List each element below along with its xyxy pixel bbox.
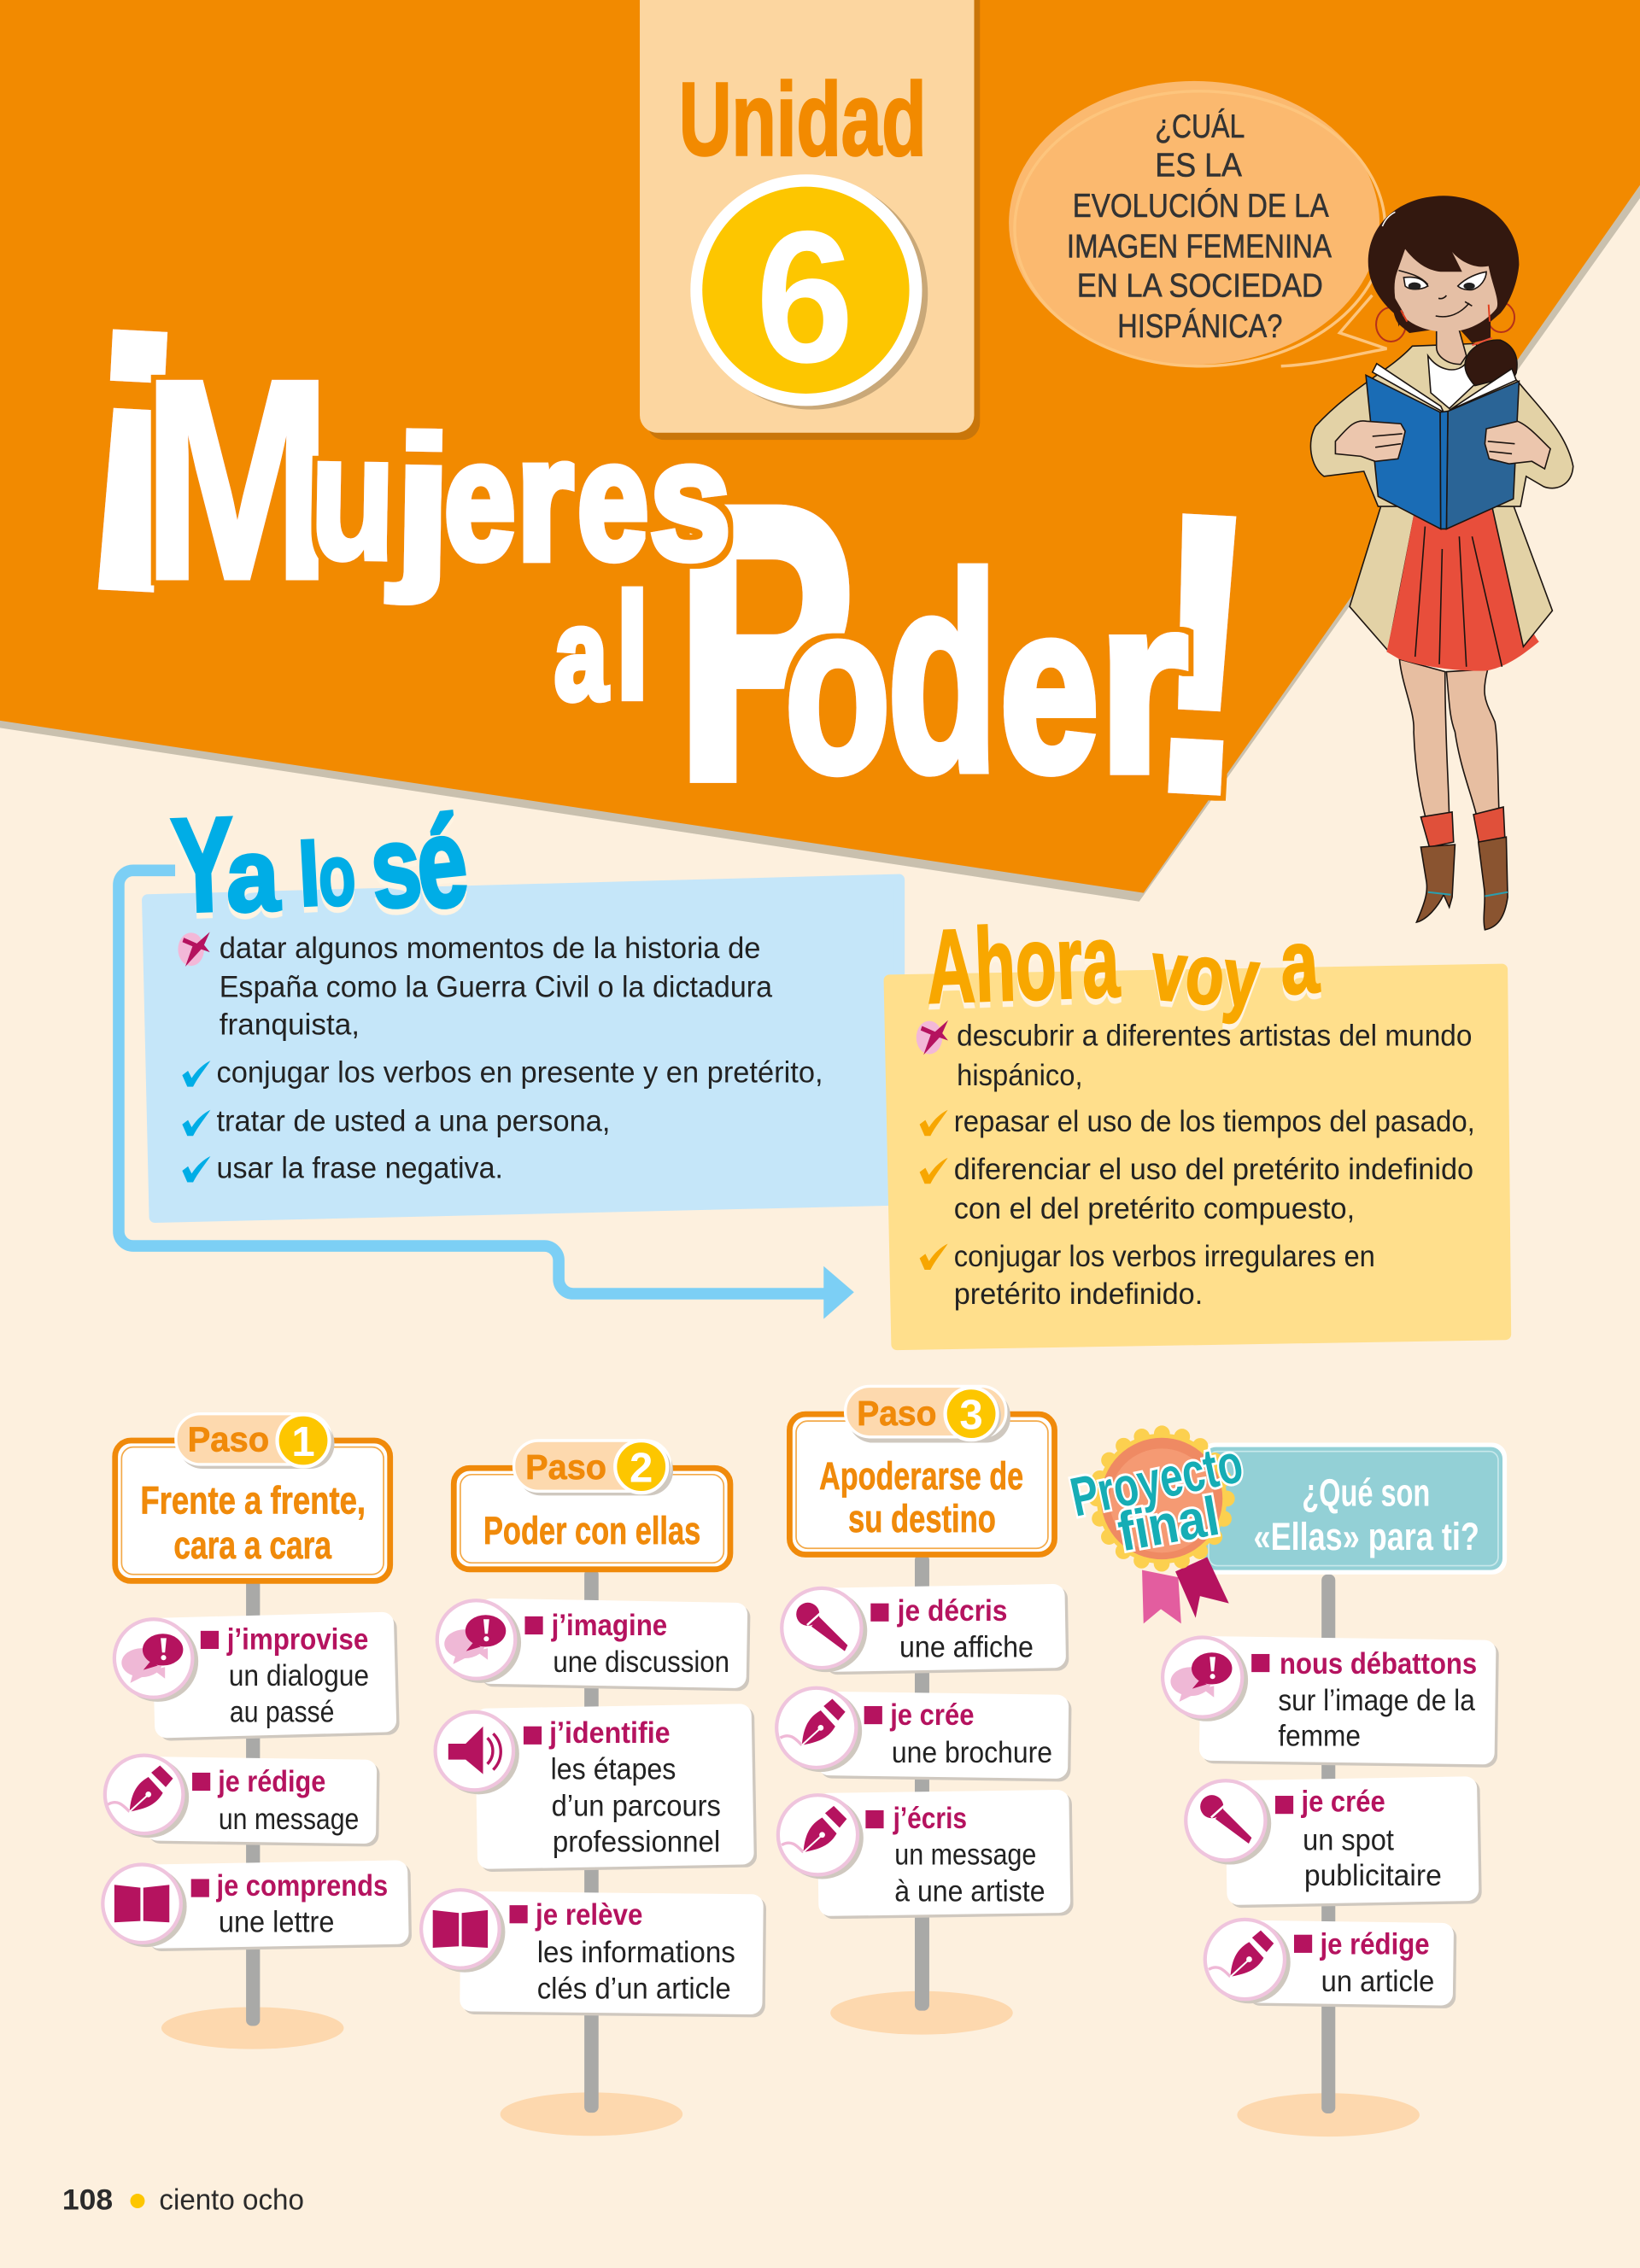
speech bubble: question: EVOLUCIÓN DE LA xyxy=(1073,188,1329,225)
heading: Ahora voy a: a xyxy=(1277,911,1322,1014)
title: ¡Mujeres al Poder!: o xyxy=(784,555,891,823)
item: je crée: je crée xyxy=(1301,1786,1385,1819)
item: je relève: je relève xyxy=(535,1899,642,1932)
speech bubble: question: ES LA xyxy=(1155,148,1242,184)
item: nous débattons xyxy=(1163,1636,1499,1768)
heading: Ya lo sé xyxy=(169,790,474,940)
list: Ya lo sé: tratar de usted a una persona, xyxy=(217,1103,610,1137)
item: je décris: je décris xyxy=(897,1595,1007,1628)
item: je relève: clés d’un article xyxy=(537,1973,731,2005)
item: j'écris: à une artiste xyxy=(894,1876,1046,1909)
item: j'écris: un message xyxy=(894,1839,1036,1872)
badge: Proyecto final: Proyecto xyxy=(1065,1432,1248,1529)
panel: Ya lo sé xyxy=(119,790,899,1319)
item: j'identifie: les étapes xyxy=(551,1754,676,1786)
list: Ya lo sé: usar la frase negativa. xyxy=(217,1150,503,1184)
item: je crée: une brochure xyxy=(892,1737,1052,1769)
item: j'improvise: j’improvise xyxy=(226,1623,368,1656)
speech bubble: question xyxy=(1009,81,1386,366)
item: j'identifie xyxy=(436,1704,757,1872)
unit tab xyxy=(640,0,980,440)
item: j'identifie: d’un parcours xyxy=(552,1791,721,1823)
list: Ya lo sé: conjugar los verbos en presente y en pretérito, xyxy=(217,1055,823,1090)
list: Ahora voy a: con el del pretérito compuesto, xyxy=(954,1191,1355,1225)
unit number circle: 6 xyxy=(756,192,854,402)
item: j'improvise: au passé xyxy=(230,1697,334,1729)
speech bubble: question: IMAGEN FEMENINA xyxy=(1067,229,1332,266)
list: Ahora voy a: diferenciar el uso del pretérito indefinido xyxy=(954,1152,1473,1186)
title: ¡Mujeres al Poder!: ! xyxy=(1130,426,1274,883)
title: ¡Mujeres al Poder!: e xyxy=(444,406,515,593)
list: Ahora voy a: hispánico, xyxy=(957,1058,1083,1092)
sign: Apoderarse de su destino: Paso xyxy=(857,1394,936,1433)
item: je crée: publicitaire xyxy=(1304,1860,1442,1892)
speech bubble: question: HISPÁNICA? xyxy=(1117,308,1282,345)
list: Ahora voy a: pretérito indefinido. xyxy=(954,1277,1203,1311)
footer: page number: ciento ocho xyxy=(159,2184,304,2217)
title: ¡Mujeres al Poder!: ¡ xyxy=(62,187,209,613)
title: ¡Mujeres al Poder!: j xyxy=(386,397,456,605)
sign: Frente a frente, cara a cara: 1 xyxy=(291,1419,315,1465)
title: ¡Mujeres al Poder! xyxy=(62,187,1274,883)
sign: ¿Qué son «Ellas» para ti? xyxy=(1200,1443,1507,1575)
arrow: from Ya lo sé to Ahora voy a xyxy=(119,870,854,1319)
illustration: girl reading a book xyxy=(1310,196,1573,930)
signpost: Paso 2 xyxy=(421,1441,766,2136)
item: je crée xyxy=(776,1688,1072,1782)
title: ¡Mujeres al Poder!: e xyxy=(577,406,648,593)
signpost: Paso 1 xyxy=(102,1414,412,2049)
girl: book and hands xyxy=(1335,364,1550,529)
item: je crée: je crée xyxy=(889,1699,974,1732)
list: Ahora voy a xyxy=(917,1019,1475,1311)
title: ¡Mujeres al Poder!: l xyxy=(612,559,653,734)
item: j'imagine: une discussion xyxy=(553,1646,729,1679)
item: nous débattons: sur l’image de la xyxy=(1278,1685,1475,1717)
speech bubble: question: EN LA SOCIEDAD xyxy=(1077,267,1323,304)
item: je rédige: un message xyxy=(219,1803,359,1836)
item: je rédige: je rédige xyxy=(217,1766,325,1798)
title: ¡Mujeres al Poder!: u xyxy=(309,398,396,597)
title: ¡Mujeres al Poder!: d xyxy=(887,518,998,830)
sign: ¿Qué son «Ellas» para ti?: ¿Qué son xyxy=(1302,1471,1430,1515)
item: j'improvise xyxy=(114,1612,400,1741)
sign: Apoderarse de su destino: su destino xyxy=(848,1497,996,1540)
item: j'écris: j’écris xyxy=(893,1803,967,1835)
item: nous débattons: nous débattons xyxy=(1280,1648,1477,1681)
item: je comprends xyxy=(102,1860,412,1951)
speech bubble: question: ¿CUÁL xyxy=(1155,108,1245,145)
sign: Apoderarse de su destino: Apoderarse de xyxy=(819,1454,1023,1498)
list: Ahora voy a: repasar el uso de los tiempos del pasado, xyxy=(954,1104,1475,1138)
footer: page number xyxy=(62,2184,304,2217)
item: je rédige: je rédige xyxy=(1320,1929,1430,1961)
list: Ya lo sé: franquista, xyxy=(220,1008,360,1042)
signpost: Proyecto final xyxy=(1065,1432,1507,2136)
item: je décris: une affiche xyxy=(899,1631,1034,1663)
heading: Ya lo sé: o xyxy=(316,826,358,925)
item: je relève: les informations xyxy=(537,1937,735,1969)
list: Ahora voy a: conjugar los verbos irregulares en xyxy=(954,1239,1375,1273)
item: je crée: un spot xyxy=(1303,1824,1394,1856)
sign: Poder con ellas xyxy=(454,1441,730,1569)
heading: Ya lo sé: l xyxy=(296,824,323,926)
sign: Apoderarse de su destino xyxy=(789,1386,1055,1555)
item: je rédige xyxy=(105,1756,380,1847)
badge: Proyecto final: final xyxy=(1113,1485,1224,1563)
sign: Frente a frente, cara a cara xyxy=(115,1414,390,1581)
item: j'écris xyxy=(778,1790,1074,1919)
title: ¡Mujeres al Poder!: r xyxy=(1098,544,1188,825)
footer: page number: 108 xyxy=(62,2184,113,2217)
sign: Poder con ellas: 2 xyxy=(630,1445,653,1491)
sign: Frente a frente, cara a cara: Paso xyxy=(188,1420,269,1459)
heading: Ya lo sé: a xyxy=(224,815,282,934)
badge: Proyecto final xyxy=(1065,1432,1248,1623)
heading: Ya lo sé: Y xyxy=(169,790,237,940)
list: Ahora voy a: descubrir a diferentes artistas del mundo xyxy=(957,1019,1472,1053)
sign: Apoderarse de su destino: 3 xyxy=(959,1392,983,1438)
item: je relève xyxy=(421,1890,766,2018)
heading: Ahora voy a: Ahora xyxy=(924,903,1122,1025)
item: j'identifie: professionnel xyxy=(553,1827,720,1859)
title: ¡Mujeres al Poder!: a xyxy=(554,582,609,728)
item: j'identifie: j’identifie xyxy=(548,1717,671,1750)
banner: orange header xyxy=(0,0,1640,902)
title: ¡Mujeres al Poder!: e xyxy=(1000,555,1098,821)
panel: Ahora voy a xyxy=(889,903,1505,1344)
sign: Frente a frente, cara a cara: cara a cara xyxy=(173,1523,331,1567)
heading: Ya lo sé: s xyxy=(364,799,427,933)
heading: Unidad: Unidad xyxy=(679,61,927,177)
list: Ya lo sé: España como la Guerra Civil o la dictadura xyxy=(220,970,772,1004)
item: j'improvise: un dialogue xyxy=(229,1660,369,1692)
girl: head and hair xyxy=(1368,196,1519,408)
list: Ya lo sé: datar algunos momentos de la historia de xyxy=(220,931,761,965)
item: j'imagine: j’imagine xyxy=(551,1610,667,1642)
item: nous débattons: femme xyxy=(1278,1721,1361,1753)
item: j'imagine xyxy=(437,1599,751,1692)
sign: Poder con ellas: Poder con ellas xyxy=(483,1509,700,1552)
unit number circle xyxy=(690,174,928,410)
sign: ¿Qué son «Ellas» para ti?: «Ellas» para ti? xyxy=(1254,1515,1479,1558)
signpost: Paso 3 xyxy=(776,1386,1074,2035)
sign: Frente a frente, cara a cara: Frente a frente, xyxy=(140,1479,366,1523)
sign: Poder con ellas: Paso xyxy=(525,1447,606,1487)
item: je comprends: une lettre xyxy=(219,1906,334,1938)
heading: Ahora voy a: voy xyxy=(1148,923,1262,1026)
title: ¡Mujeres al Poder!: r xyxy=(517,402,573,596)
item: je rédige: un article xyxy=(1321,1966,1434,1998)
item: je comprends: je comprends xyxy=(216,1870,388,1903)
list: Ya lo sé xyxy=(178,931,823,1184)
title: ¡Mujeres al Poder!: s xyxy=(650,406,730,593)
heading: Ya lo sé: é xyxy=(409,790,474,936)
item: je rédige xyxy=(1205,1920,1456,2008)
title: ¡Mujeres al Poder!: M xyxy=(143,320,332,639)
item: je décris xyxy=(782,1584,1069,1675)
item: je crée xyxy=(1186,1776,1482,1908)
title: ¡Mujeres al Poder!: P xyxy=(676,426,854,860)
